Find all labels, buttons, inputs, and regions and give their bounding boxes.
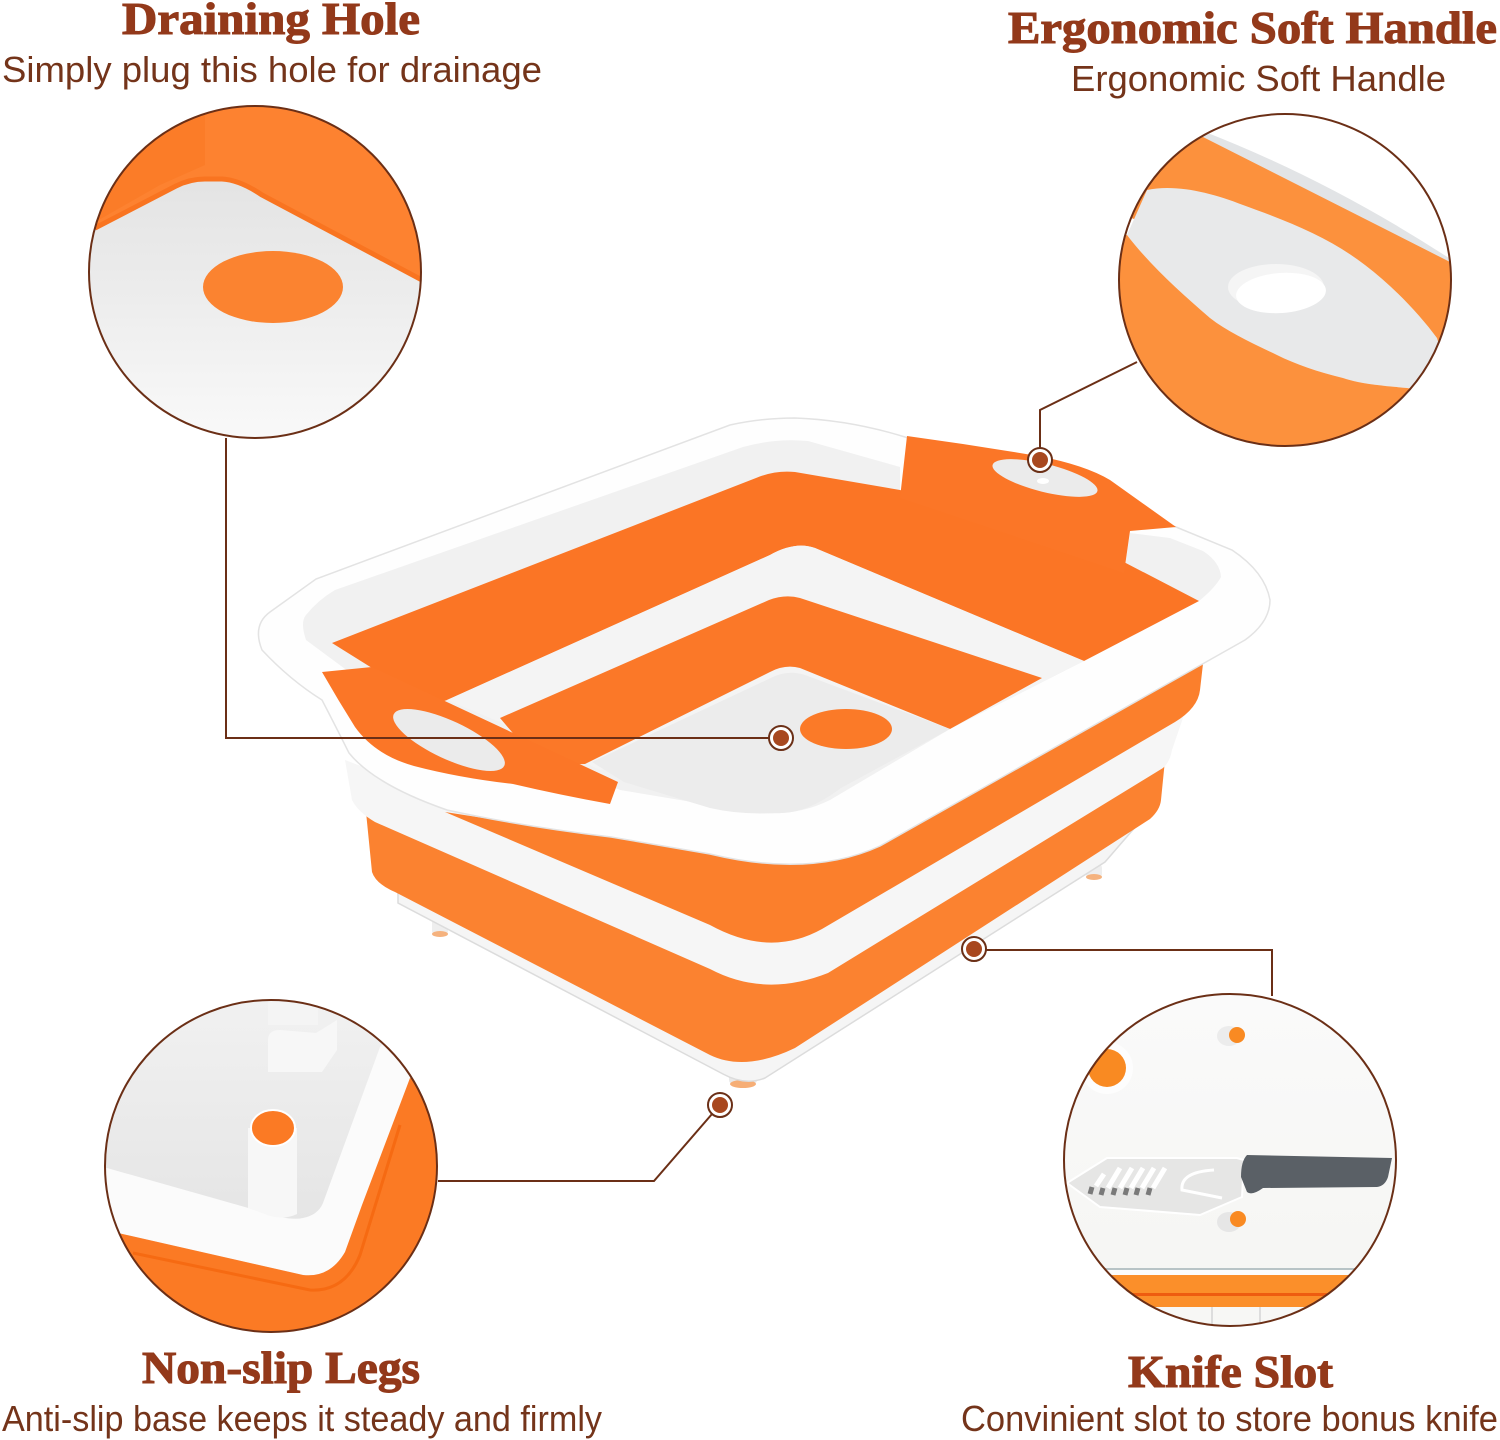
upper orange fold [445,655,1204,943]
heading: Non-slip Legs: Non-slip Legs [142,1342,420,1393]
leader line: draining hole [226,438,793,750]
heading: Ergonomic Soft Handle: Ergonomic Soft Handle [1008,2,1497,53]
upper inner orange wall [332,472,1199,710]
inner wall grey [303,440,1221,813]
drain plug [800,709,892,749]
left handle [322,667,618,804]
lower orange fold [366,760,1165,1062]
heading: Knife Slot: Knife Slot [1128,1346,1334,1397]
text: Draining Hole description: Simply plug this hole for drainage [2,49,542,90]
circle: non-slip legs detail [90,995,440,1340]
knife [1067,1155,1392,1215]
inner white ledge [447,546,1084,770]
circle: draining hole detail [88,105,422,439]
text: Non-slip Legs description: Anti-slip base keeps it steady and firmly [2,1398,602,1439]
circle: ergonomic handle detail [1118,113,1452,447]
leader line: ergonomic handle [1028,362,1137,472]
text: Ergonomic Soft Handle description: Ergonomic Soft Handle [1071,58,1446,99]
circle: knife slot detail [1060,994,1400,1337]
right handle [900,436,1176,573]
leader line: non-slip legs [438,1093,732,1181]
lower inner orange wall [500,596,1042,765]
white rim [258,418,1270,864]
product: collapsible orange and white basin [258,418,1270,1088]
leader line: knife slot [962,937,1272,996]
white fold band [345,700,1185,985]
basin floor [592,673,950,813]
basin base with feet [398,810,1150,1088]
